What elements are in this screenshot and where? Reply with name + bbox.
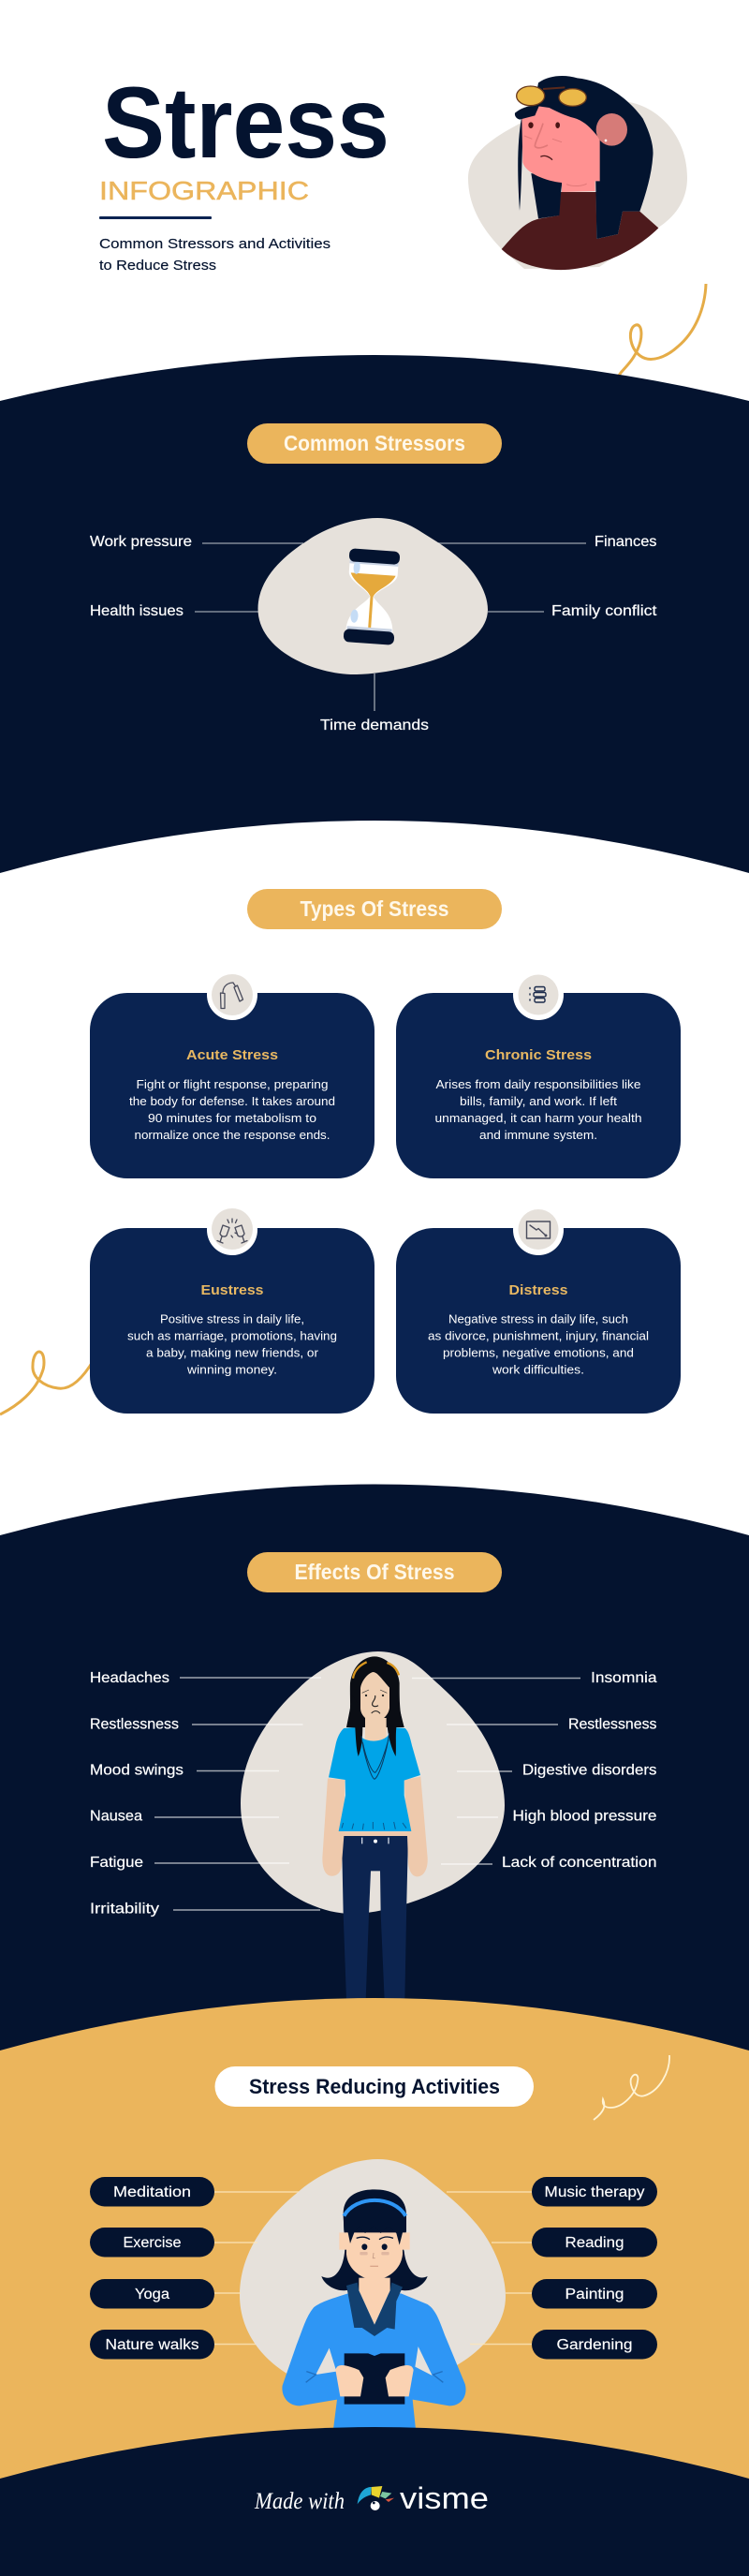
decorative squiggle: top right xyxy=(616,284,706,379)
card: acute stress: Acute Stress xyxy=(186,1047,278,1063)
footer background xyxy=(0,2427,749,2576)
connector lines xyxy=(195,543,586,711)
illustration: stressed woman portrait xyxy=(468,76,687,270)
panel: common stressors xyxy=(90,423,657,733)
card: distress: Negative stress in daily life, such xyxy=(448,1313,628,1326)
effect labels: right: Lack of concentration xyxy=(502,1855,657,1871)
blob xyxy=(241,1651,505,1914)
illustration: sad woman standing xyxy=(322,1656,428,2000)
card: eustress: such as marriage, promotions, having xyxy=(127,1330,337,1343)
effect labels: left: Nausea xyxy=(90,1808,142,1825)
activity pills: left xyxy=(90,2177,214,2359)
card: acute stress: normalize once the response ends. xyxy=(135,1129,330,1142)
card: chronic stress: bills, family, and work. If left xyxy=(460,1095,618,1108)
activity pills: right: Painting xyxy=(565,2287,624,2302)
description: to Reduce Stress xyxy=(99,258,216,274)
effect labels: right: Insomnia xyxy=(591,1670,657,1686)
heading pill: common stressors: Common Stressors xyxy=(284,431,465,455)
heading pill: stress reducing activities xyxy=(215,2066,534,2107)
activity pills: right xyxy=(532,2177,657,2359)
title block xyxy=(99,66,389,274)
card: eustress xyxy=(90,1205,374,1414)
icon: list xyxy=(530,987,546,1002)
effect labels: left: Irritability xyxy=(90,1902,159,1917)
effect labels: left: Mood swings xyxy=(90,1763,184,1778)
description: Common Stressors and Activities xyxy=(99,236,330,252)
stressor labels: Time demands xyxy=(320,718,429,733)
panel: types of stress xyxy=(90,889,681,1414)
activity pills: left: Meditation xyxy=(113,2184,191,2200)
activity pills: left: Nature walks xyxy=(105,2337,199,2353)
card: acute stress: 90 minutes for metabolism to xyxy=(148,1112,316,1125)
effect labels: left xyxy=(90,1670,184,1917)
panel: common stressors background xyxy=(0,355,749,873)
panel: stress reducing activities xyxy=(90,2055,669,2429)
stressor labels xyxy=(90,534,657,733)
card: distress: problems, negative emotions, and xyxy=(443,1347,634,1360)
icon: nunchaku xyxy=(221,983,243,1008)
heading pill: types of stress xyxy=(247,889,502,929)
subtitle: infographic: INFOGRAPHIC xyxy=(99,176,309,205)
card: eustress: winning money. xyxy=(186,1364,277,1377)
card: chronic stress: Chronic Stress xyxy=(485,1047,592,1063)
icon: clinking glasses xyxy=(217,1219,247,1243)
card: chronic stress: Arises from daily responsibilities like xyxy=(436,1078,641,1091)
icon: visme logo xyxy=(358,2486,394,2510)
activity pills: left: Yoga xyxy=(135,2287,169,2302)
icon: declining chart xyxy=(526,1221,551,1238)
card: distress: work difficulties. xyxy=(492,1364,584,1377)
card: eustress: Eustress xyxy=(200,1282,264,1298)
illustration: woman holding a book xyxy=(282,2189,466,2429)
activity pills: right: Gardening xyxy=(556,2337,633,2353)
activity pills: right: Music therapy xyxy=(545,2184,645,2200)
panel: stress reducing activities background xyxy=(0,1998,749,2529)
footer: made with visme xyxy=(254,2481,489,2515)
footer: made with visme: Made with xyxy=(254,2489,345,2514)
card: eustress: a baby, making new friends, or xyxy=(146,1347,318,1360)
icon: hourglass xyxy=(344,548,400,645)
card: distress: as divorce, punishment, injury, financial xyxy=(428,1330,649,1343)
effect labels: left: Headaches xyxy=(90,1670,169,1686)
activity pills: left: Exercise xyxy=(124,2235,182,2251)
effect labels: right: Restlessness xyxy=(568,1716,657,1733)
card: chronic stress: unmanaged, it can harm your health xyxy=(434,1112,642,1125)
heading pill: common stressors xyxy=(247,423,502,464)
card: chronic stress xyxy=(396,970,681,1178)
stressor labels: Family conflict xyxy=(551,603,657,619)
heading pill: effects of stress xyxy=(247,1552,502,1592)
panel: effects of stress xyxy=(90,1552,657,2000)
effect labels: right: High blood pressure xyxy=(513,1808,657,1825)
card: acute stress xyxy=(90,970,374,1178)
effect labels: right: Digestive disorders xyxy=(522,1763,657,1778)
heading pill: types of stress: Types Of Stress xyxy=(300,896,449,921)
panel: effects of stress background xyxy=(0,1484,749,2576)
card: eustress: Positive stress in daily life, xyxy=(160,1313,304,1326)
heading pill: stress reducing activities: Stress Reducing Activities xyxy=(249,2075,500,2098)
effect labels: left: Restlessness xyxy=(90,1716,179,1733)
connector lines xyxy=(214,2192,532,2344)
card: distress xyxy=(396,1205,681,1414)
activity pills: right: Reading xyxy=(565,2235,624,2251)
blob xyxy=(240,2159,506,2393)
stressor labels: Finances xyxy=(595,534,657,550)
decorative squiggle: white xyxy=(594,2055,669,2120)
card: acute stress: the body for defense. It takes around xyxy=(129,1095,335,1108)
blob xyxy=(258,518,488,674)
connector lines xyxy=(154,1678,580,1910)
stressor labels: Health issues xyxy=(90,603,184,619)
footer: made with visme: visme xyxy=(400,2481,489,2515)
card: distress: Distress xyxy=(509,1282,567,1298)
effect labels: left: Fatigue xyxy=(90,1855,143,1871)
heading pill: effects of stress: Effects Of Stress xyxy=(294,1560,455,1584)
title: Stress xyxy=(102,66,389,179)
card: chronic stress: and immune system. xyxy=(479,1129,597,1142)
effect labels: right xyxy=(502,1670,657,1871)
card: acute stress: Fight or flight response, preparing xyxy=(137,1078,329,1091)
stressor labels: Work pressure xyxy=(90,534,192,550)
decorative squiggle: left xyxy=(0,1352,94,1414)
